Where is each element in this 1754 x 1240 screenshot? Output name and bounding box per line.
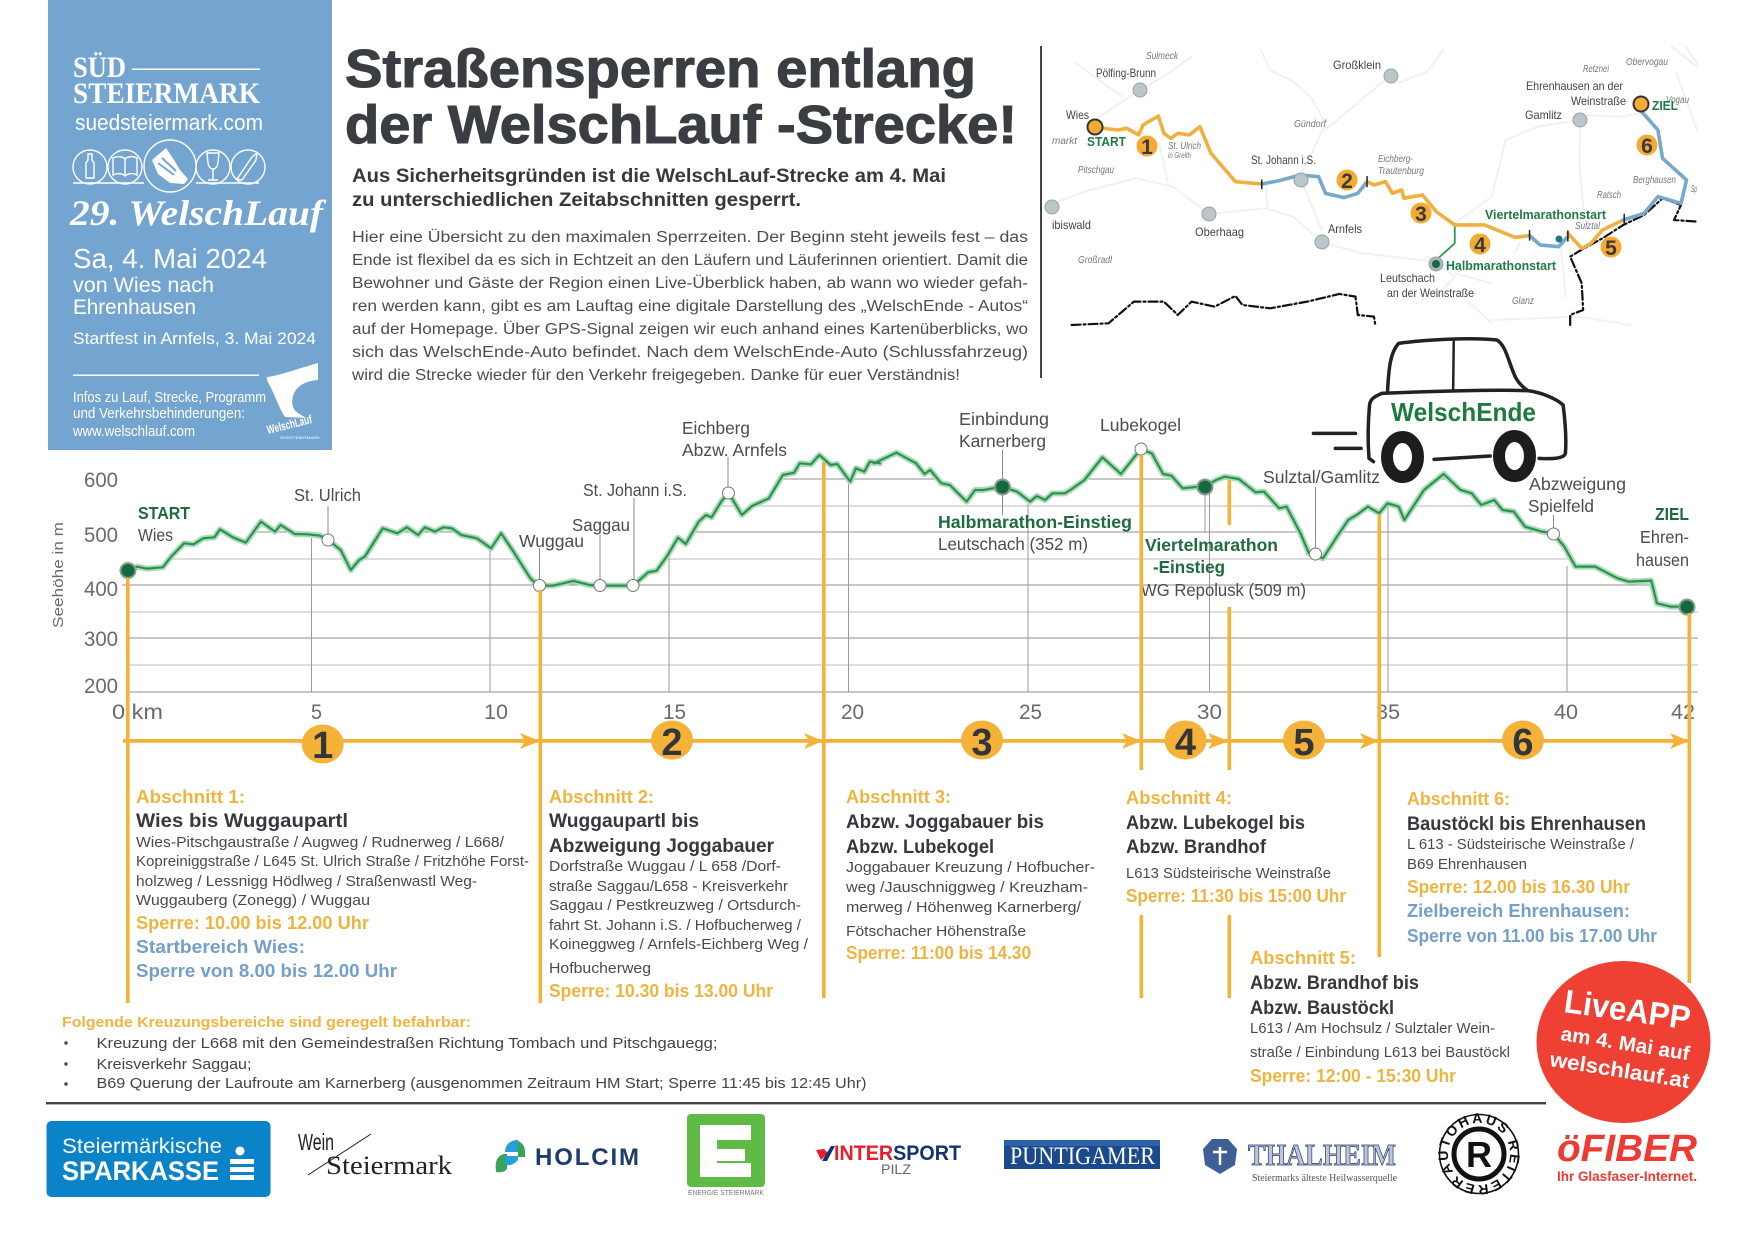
section 4 details: [1126, 788, 1346, 906]
title: [345, 39, 1017, 155]
logo: Thalheim: [1203, 1137, 1397, 1184]
section 2 details: Sperre: 10.30 bis 13.00 Uhr: [549, 981, 773, 1001]
section 4 details: Abschnitt 4:: [1126, 788, 1232, 808]
map labels: Halbmarathonstart: [1446, 259, 1557, 273]
map labels: St. Johann i.S.: [1251, 153, 1316, 167]
crossing notes: [62, 1014, 866, 1092]
map section numbers: [1136, 134, 1658, 260]
section 2 details: Saggau / Pestkreuzweg / Ortsdurch-: [549, 898, 801, 914]
panel: Südsteiermark event sidebar: [48, 0, 332, 450]
map labels: Ratsch: [1597, 189, 1621, 201]
section 6 details: Zielbereich Ehrenhausen:: [1407, 901, 1630, 921]
x axis labels: [112, 701, 1695, 724]
map labels: Obervogau: [1626, 56, 1668, 68]
chart location labels: Saggau: [572, 515, 630, 535]
logo: Energie Steiermark: [687, 1114, 765, 1197]
section 1 details: Sperre von 8.00 bis 12.00 Uhr: [136, 961, 397, 981]
section 4 details: Abzw. Brandhof: [1126, 837, 1267, 858]
elevation profile line: [128, 449, 1688, 607]
intro text block: ren werden kann, gibt es am Lauftag eine digitale Darstellung des „WelschEnde - Autos“: [352, 298, 1028, 315]
information text: und Verkehrsbehinderungen:: [73, 406, 245, 422]
intro text block: Bewohner und Gäste der Region einen Live-Überblick haben, ab wann wo wieder gefah-: [352, 274, 1028, 292]
section 3 details: [845, 787, 1095, 963]
logo: Energie Steiermark: ENERGIE STEIERMARK: [688, 1190, 764, 1197]
map labels: Leutschach: [1380, 271, 1435, 285]
map section numbers: 6: [1641, 135, 1653, 158]
section number badges: 6: [1512, 722, 1534, 764]
chart location labels: St. Ulrich: [294, 485, 361, 505]
route: [73, 274, 214, 319]
logo: öFiber: Ihr Glasfaser-Internet.: [1557, 1169, 1697, 1184]
section 2 details: Koineggweg / Arnfels-Eichberg Weg /: [549, 937, 809, 953]
intro text block: auf der Homepage. Über GPS-Signal zeigen wir euch anhand eines Kartenüberblicks, wo: [352, 320, 1028, 338]
subheading: zu unterschiedlichen Zeitabschnitten gesperrt.: [352, 190, 801, 211]
chart location labels: Karnerberg: [959, 431, 1046, 451]
section 1 details: Startbereich Wies:: [136, 937, 305, 957]
section 1 details: Wies-Pitschgaustraße / Augweg / Rudnerweg / L668/: [136, 835, 505, 851]
map labels: Gündorf: [1294, 118, 1327, 130]
section 5 details: straße / Einbindung L613 bei Baustöckl: [1250, 1045, 1510, 1061]
x axis labels: 25: [1019, 701, 1042, 724]
section number badges: 5: [1293, 722, 1315, 764]
section 5 details: [1250, 948, 1510, 1086]
event title: 29. WelschLauf: [69, 193, 326, 233]
icon: WelschLauf foot logo: SÜDSTEIERMARK: [280, 435, 320, 440]
map labels: Großradl: [1078, 254, 1113, 266]
section number badges: 1: [312, 725, 333, 767]
section 5 details: Abschnitt 5:: [1250, 948, 1356, 968]
map place markers: [1045, 69, 1587, 271]
information text: Infos zu Lauf, Strecke, Programm: [73, 390, 266, 406]
map labels: an der Weinstraße: [1387, 286, 1474, 300]
chart location labels: -Einstieg: [1153, 557, 1225, 577]
section number badges: 2: [661, 722, 683, 764]
map labels: [1052, 50, 1697, 307]
crossing notes: B69 Querung der Laufroute am Karnerberg (ausgenommen Zeitraum HM Start; Sperre 11:45 bis 12:45 Uhr): [96, 1075, 866, 1092]
chart location labels: Leutschach (352 m): [938, 534, 1088, 554]
icon: WelschLauf foot logo: [265, 363, 320, 440]
section timeline: [123, 455, 1691, 1003]
chart location labels: Ehren-: [1640, 527, 1689, 547]
subheading: [352, 166, 946, 211]
map labels: Großklein: [1333, 58, 1381, 72]
map roads: [1053, 47, 1697, 325]
section 2 details: straße Saggau/L658 - Kreisverkehr: [549, 879, 788, 895]
chart location labels: Viertelmarathon: [1145, 535, 1278, 555]
intro text block: Hier eine Übersicht zu den maximalen Sperrzeiten. Der Beginn steht jeweils fest – das: [352, 228, 1028, 246]
x axis labels: 0 km: [112, 701, 163, 724]
panel: route map: [1045, 47, 1697, 325]
chart location labels: Lubekogel: [1100, 415, 1181, 435]
map labels: Viertelmarathonstart: [1485, 208, 1607, 222]
logo: Holcim: HOLCIM: [535, 1144, 639, 1171]
section 2 details: Abzweigung Joggabauer: [549, 836, 775, 857]
section 3 details: merweg / Höhenweg Karnerberg/: [846, 900, 1082, 916]
startfest: Startfest in Arnfels, 3. Mai 2024: [73, 329, 316, 348]
map labels: Glanz: [1512, 295, 1535, 307]
chart location labels: [138, 409, 1689, 600]
y axis labels: 600: [84, 469, 118, 492]
intro text block: Ende ist flexibel da es sich in Echtzeit an den Läufern und Läuferinnen orientiert. Damit die: [352, 252, 1028, 269]
y axis labels: [50, 469, 118, 698]
section 6 details: Baustöckl bis Ehrenhausen: [1407, 814, 1646, 835]
chart location labels: WG Repolusk (509 m): [1141, 580, 1306, 600]
map section numbers: 4: [1474, 234, 1486, 257]
logo: Puntigamer: PUNTIGAMER: [1010, 1143, 1155, 1170]
point-of-interest leader lines: [328, 450, 1554, 580]
elevation chart: [50, 409, 1699, 724]
chart location labels: St. Johann i.S.: [583, 480, 687, 500]
car label: WelschEnde: [1391, 397, 1536, 427]
chart location labels: Wies: [138, 525, 173, 545]
information text: www.welschlauf.com: [72, 424, 195, 440]
chart location labels: Wuggau: [519, 531, 584, 551]
map labels: START: [1087, 135, 1126, 149]
callout: LiveAPP red circle: [1536, 961, 1710, 1123]
section 1 details: Wuggauberg (Zonegg) / Wuggau: [136, 893, 370, 909]
section 6 details: Abschnitt 6:: [1407, 789, 1510, 809]
section 2 details: [549, 787, 809, 1001]
section 6 details: [1407, 789, 1657, 946]
intro text block: [351, 228, 1028, 384]
icon: WelschLauf foot logo: WelschLauf: [265, 412, 314, 437]
section 2 details: Hofbucherweg: [549, 961, 651, 977]
map section numbers: 3: [1415, 203, 1427, 226]
chart markers: [120, 443, 1694, 614]
logo: Steiermärkische Sparkasse: [46, 1121, 270, 1197]
section 6 details: Sperre von 11.00 bis 17.00 Uhr: [1407, 926, 1657, 946]
x axis labels: 30: [1197, 701, 1222, 724]
section 1 details: Abschnitt 1:: [136, 787, 245, 807]
chart location labels: START: [138, 503, 190, 523]
map labels: Weinstraße: [1571, 94, 1626, 108]
logo: Thalheim: THALHEIM: [1248, 1137, 1396, 1172]
chart location labels: Halbmarathon-Einstieg: [938, 512, 1132, 532]
section 1 details: Wies bis Wuggaupartl: [136, 811, 348, 832]
text: Sp: [1691, 183, 1697, 195]
title: der WelschLauf -Strecke!: [345, 95, 1017, 155]
section 5 details: Abzw. Baustöckl: [1250, 998, 1394, 1019]
logo: Holcim: [496, 1140, 639, 1172]
callout: LiveAPP red circle: LiveAPP: [1562, 982, 1693, 1037]
y axis labels: 500: [84, 524, 118, 547]
icon: WelschEnde car: [1313, 339, 1566, 477]
section 3 details: Joggabauer Kreuzung / Hofbucher-: [846, 860, 1095, 876]
map labels: Retznei: [1583, 63, 1609, 75]
section 4 details: L613 Südsteirische Weinstraße: [1126, 866, 1331, 882]
logo: Steiermärkische Sparkasse: SPARKASSE: [62, 1156, 219, 1186]
x axis labels: 20: [841, 701, 864, 724]
route: von Wies nach: [73, 274, 214, 297]
x axis labels: 5: [311, 701, 322, 724]
chart location labels: Eichberg: [682, 418, 750, 438]
horizontal arrow line: [123, 733, 1689, 749]
chart location labels: hausen: [1636, 550, 1689, 570]
section 2 details: Dorfstraße Wuggau / L 658 /Dorf-: [549, 859, 781, 875]
intro text block: wird die Strecke wieder für den Verkehr freigegeben. Danke für euer Verständnis!: [351, 367, 960, 384]
route: Ehrenhausen: [73, 296, 196, 319]
logo: Wein Steiermark: Wein: [298, 1129, 334, 1155]
map start and finish markers: [1088, 96, 1648, 134]
section 5 details: Abzw. Brandhof bis: [1250, 973, 1419, 994]
callout: LiveAPP red circle: am 4. Mai auf: [1559, 1023, 1691, 1065]
section 2 details: Wuggaupartl bis: [549, 811, 699, 832]
y axis labels: 200: [84, 675, 118, 698]
km grid verticals: [312, 483, 1567, 692]
map labels: Vogau: [1666, 94, 1689, 106]
chart location labels: Abzw. Arnfels: [682, 440, 787, 460]
map labels: Berghausen: [1633, 174, 1676, 186]
section number badges: 4: [1175, 722, 1196, 764]
logo: Intersport Pilz: INTERSPORT: [834, 1142, 961, 1165]
section 6 details: L 613 - Südsteirische Weinstraße /: [1407, 837, 1635, 853]
logo: Autohaus Reiterer: AUTOHAUS REITERER: [1438, 1113, 1520, 1194]
crossing notes: Folgende Kreuzungsbereiche sind geregelt befahrbar:: [62, 1014, 471, 1031]
section 2 details: fahrt St. Johann i.S. / Hofbucherweg /: [549, 918, 802, 934]
map labels: Pölfing-Brunn: [1096, 66, 1156, 80]
chart location labels: Abzweigung: [1529, 474, 1626, 494]
y axis labels: Seehöhe in m: [50, 522, 67, 628]
section 6 details: B69 Ehrenhausen: [1407, 857, 1527, 873]
logo: öFiber: öFIBER: [1557, 1128, 1698, 1170]
logo: Autohaus Reiterer: R: [1466, 1134, 1492, 1175]
map route line: [1095, 112, 1687, 260]
map labels: ZIEL: [1652, 99, 1678, 113]
map labels: Pitschgau: [1078, 164, 1114, 176]
x axis labels: 15: [663, 701, 686, 724]
map section numbers: 1: [1141, 136, 1153, 159]
section 2 details: Abschnitt 2:: [549, 787, 654, 807]
section 4 details: Sperre: 11:30 bis 15:00 Uhr: [1126, 886, 1346, 906]
x axis labels: 40: [1554, 701, 1578, 724]
chart location labels: ZIEL: [1655, 504, 1689, 524]
map labels: St. Ulrich: [1168, 140, 1201, 152]
map labels: in Greith: [1168, 151, 1191, 160]
chart location labels: Spielfeld: [1528, 496, 1594, 516]
chart location labels: Sulztal/Gamlitz: [1263, 467, 1380, 487]
section 1 details: [136, 787, 529, 981]
map section numbers: 2: [1341, 170, 1353, 193]
crossing notes: Kreisverkehr Saggau;: [96, 1056, 252, 1073]
map section numbers: 5: [1605, 237, 1617, 260]
map labels: Trautenburg: [1378, 165, 1424, 177]
map labels: markt: [1052, 135, 1078, 147]
map labels: ibiswald: [1052, 218, 1091, 232]
section 4 details: Abzw. Lubekogel bis: [1126, 813, 1305, 834]
chart location labels: Einbindung: [959, 409, 1049, 429]
section 3 details: Abzw. Joggabauer bis: [846, 812, 1044, 833]
section 6 details: Sperre: 12.00 bis 16.30 Uhr: [1407, 877, 1630, 897]
crossing notes: Kreuzung der L668 mit den Gemeindestraßen Richtung Tombach und Pitschgauegg;: [96, 1035, 718, 1052]
intro text block: sich das WelschEnde-Auto befindet. Nach dem WelschEnde-Auto (Schlussfahrzeug): [352, 344, 1028, 361]
section 3 details: Sperre: 11:00 bis 14.30: [846, 943, 1031, 963]
section 3 details: Fötschacher Höhenstraße: [846, 924, 1026, 940]
icon row: bottle, book, shoe, glass, horn: [73, 140, 265, 192]
logo: Wein Steiermark: [298, 1129, 452, 1180]
section 5 details: L613 / Am Hochsulz / Sulztaler Wein-: [1250, 1021, 1495, 1037]
section divider lines: [126, 455, 1691, 1003]
section 1 details: holzweg / Lessnigg Hödlweg / Straßenwastl Weg-: [136, 874, 477, 890]
section 3 details: Abschnitt 3:: [846, 787, 951, 807]
map labels: Oberhaag: [1195, 225, 1244, 239]
logo: Thalheim: Steiermarks älteste Heilwasserquelle: [1252, 1172, 1397, 1184]
x axis labels: 42: [1671, 701, 1695, 724]
logo: Wein Steiermark: Steiermark: [326, 1151, 452, 1180]
callout: LiveAPP red circle: welschlauf.at: [1547, 1048, 1691, 1093]
section 3 details: weg /Jauschniggweg / Kreuzham-: [845, 880, 1088, 896]
map labels: Sulztal: [1575, 220, 1601, 232]
title: Straßensperren entlang: [345, 39, 976, 99]
logo: Intersport Pilz: [816, 1142, 961, 1177]
x axis labels: 35: [1376, 701, 1400, 724]
subheading: Aus Sicherheitsgründen ist die WelschLauf-Strecke am 4. Mai: [352, 166, 946, 187]
logo: Süd Steiermark wordmark: STEIERMARK: [73, 77, 261, 110]
section number badges: 3: [971, 722, 993, 764]
event date: Sa, 4. Mai 2024: [73, 243, 267, 274]
logo: Intersport Pilz: PILZ: [881, 1161, 911, 1177]
y axis labels: 400: [84, 578, 118, 601]
section 1 details: Kopreiniggstraße / L645 St. Ulrich Straße / Fritzhöhe Forst-: [136, 854, 529, 870]
website link: suedsteiermark.com: [75, 110, 263, 135]
map labels: Arnfels: [1328, 222, 1362, 236]
map labels: Ehrenhausen an der: [1526, 79, 1623, 93]
information text: [72, 390, 266, 440]
logo: Süd Steiermark wordmark: SÜD: [73, 51, 126, 84]
map labels: Gamlitz: [1525, 108, 1562, 122]
logo: Steiermärkische Sparkasse: Steiermärkische: [62, 1135, 222, 1158]
section number badges: [302, 720, 1544, 767]
section 1 details: Sperre: 10.00 bis 12.00 Uhr: [136, 913, 369, 933]
section 3 details: Abzw. Lubekogel: [846, 837, 994, 858]
map labels: Sulmeck: [1146, 50, 1179, 62]
section 5 details: Sperre: 12:00 - 15:30 Uhr: [1250, 1066, 1456, 1086]
map labels: Eichberg-: [1378, 153, 1413, 165]
logo: Süd Steiermark wordmark: [73, 51, 261, 110]
x axis labels: 10: [484, 701, 508, 724]
map labels: Wies: [1066, 108, 1089, 122]
map borders: [1072, 198, 1697, 325]
y axis labels: 300: [84, 628, 118, 651]
